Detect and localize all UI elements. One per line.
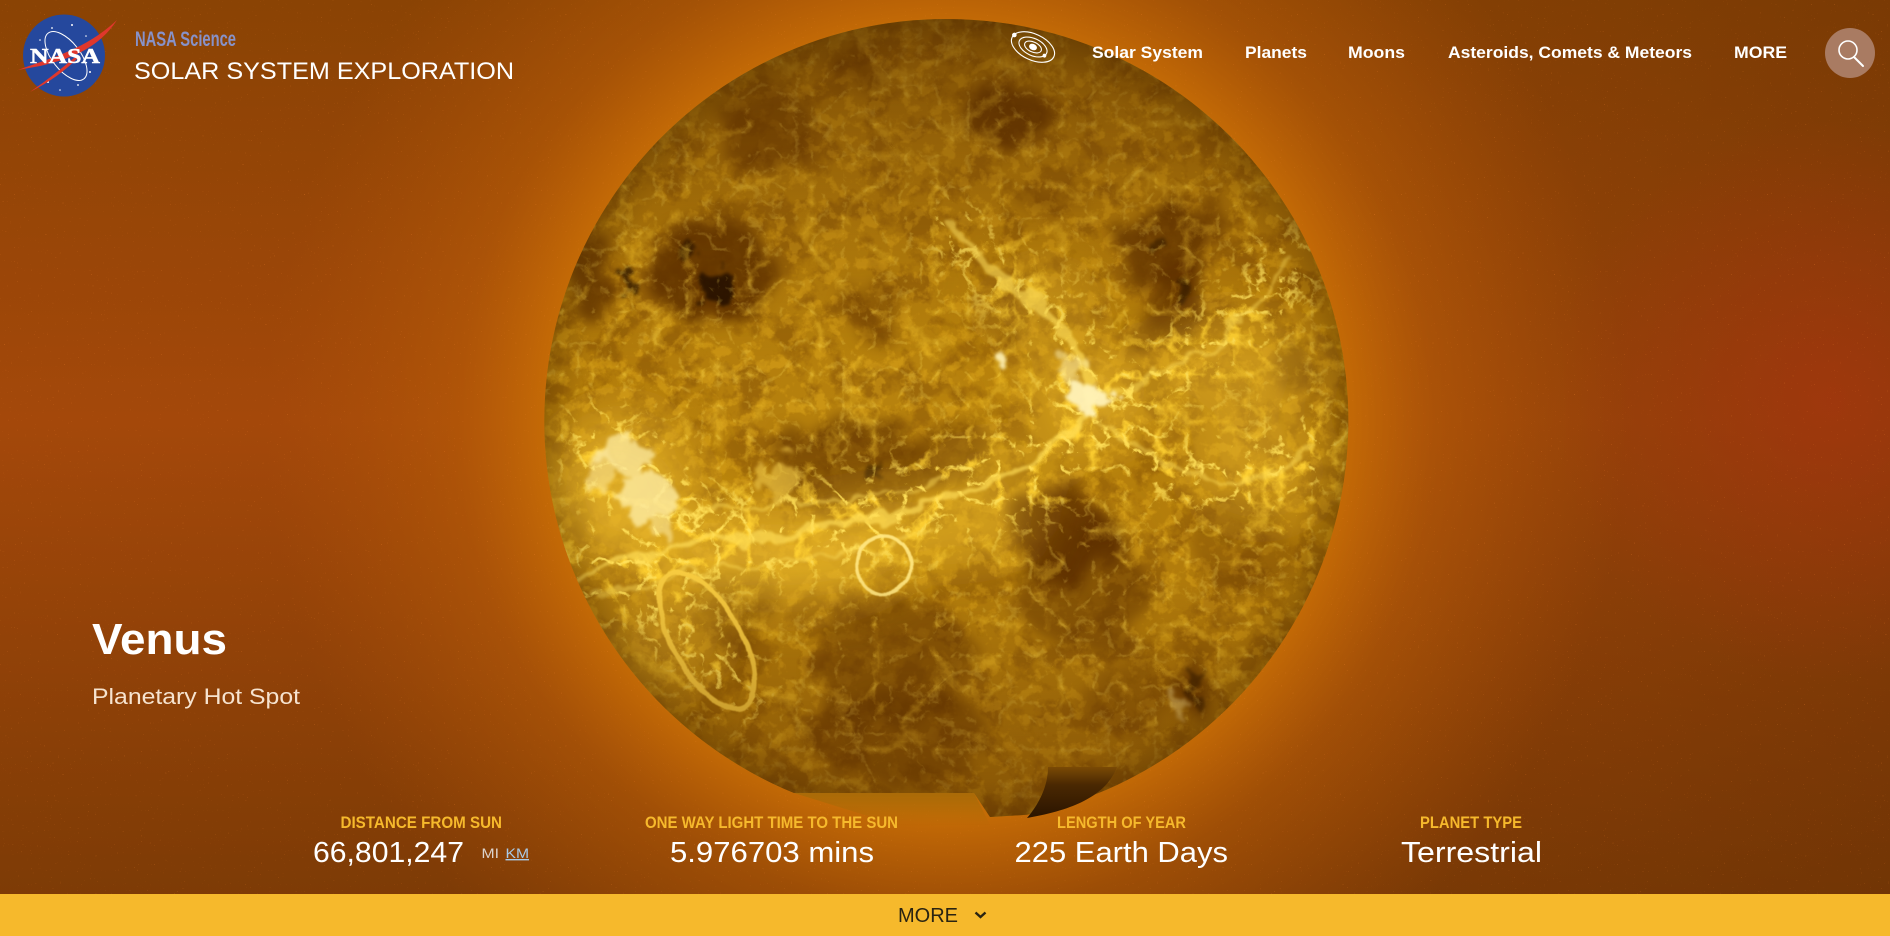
more bar: MORE [898, 905, 958, 927]
more bar [0, 894, 1890, 936]
navigation: Solar System [1092, 43, 1203, 62]
brand: Solar System Exploration: SOLAR SYSTEM EXPLORATION [134, 58, 514, 85]
soft bright highland glow [550, 270, 1330, 690]
logo stars [39, 24, 95, 91]
stat: planet type: Terrestrial [1401, 837, 1542, 869]
global ridge texture [540, 15, 1355, 830]
navigation [1092, 43, 1787, 62]
stat: length of year [1014, 813, 1228, 869]
icon: search button [1825, 28, 1875, 78]
stat: distance from sun: KM [506, 845, 529, 861]
bright highland patches [586, 352, 1184, 720]
stat: distance from sun: DISTANCE FROM SUN [340, 813, 502, 832]
limb shading [540, 15, 1355, 830]
stat: distance from sun: MI [482, 845, 499, 861]
title: Venus: Venus [92, 615, 227, 664]
icon: chevron [976, 912, 986, 917]
stat: light time: 5.976703 mins [670, 837, 874, 869]
near-black crater patches [623, 242, 1201, 710]
stat: light time: ONE WAY LIGHT TIME TO THE SUN [645, 813, 898, 832]
NASA logo: NASA [30, 44, 101, 68]
brown volcanic lowlands [570, 50, 1306, 787]
dark curl at map seam [1027, 767, 1117, 818]
stat: length of year: 225 Earth Days [1014, 837, 1228, 869]
bright ridge lines [578, 229, 1314, 600]
navigation: Planets [1245, 43, 1307, 62]
navigation: MORE [1734, 43, 1787, 62]
subtitle: Planetary Hot Spot [92, 684, 300, 709]
bottom torn flap [794, 793, 990, 826]
corona ring outlines [640, 536, 911, 723]
brand: NASA Science: NASA Science [135, 28, 236, 51]
stat: light time [645, 813, 898, 869]
stat: distance from sun [313, 813, 529, 869]
stat: planet type [1401, 813, 1542, 869]
stat: distance from sun: 66,801,247 [313, 837, 464, 869]
navigation: Moons [1348, 43, 1405, 62]
bright tessera bands [556, 186, 1348, 734]
navigation: Asteroids, Comets & Meteors [1448, 43, 1692, 62]
planet: Venus globe [540, 15, 1355, 830]
NASA logo [18, 14, 117, 96]
icon: solar system orbits [1006, 25, 1059, 69]
stat: planet type: PLANET TYPE [1420, 813, 1522, 832]
stat: length of year: LENGTH OF YEAR [1057, 813, 1186, 832]
